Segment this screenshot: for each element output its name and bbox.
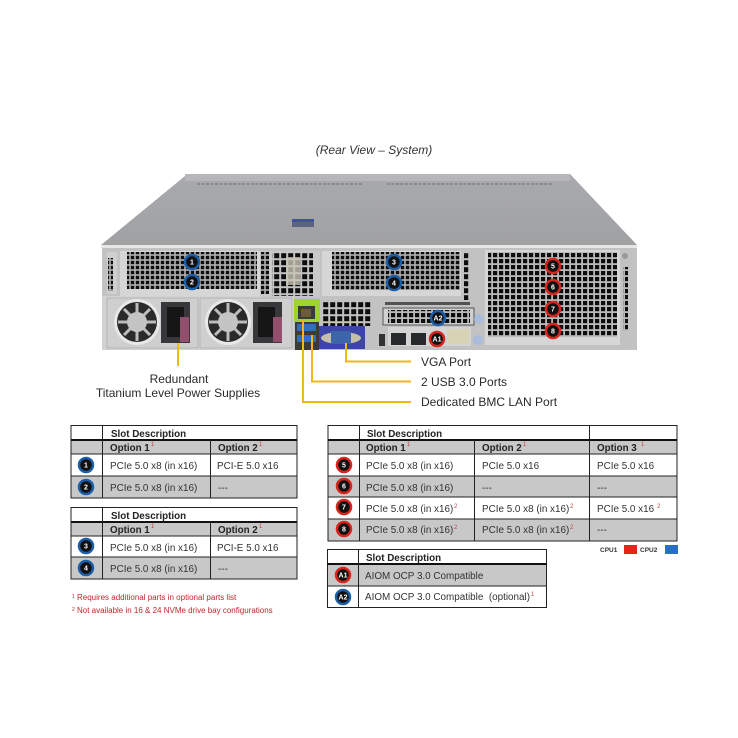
table: slots 5 to 8: PCIe 5.0 x8 (in x16) [366,525,453,536]
table: slots 1 and 2 [71,425,297,498]
chassis top cover [101,174,637,245]
table: slots 5 to 8: PCIe 5.0 x8 (in x16) [482,504,569,515]
server chassis rear view [101,174,637,350]
table: slots 1 and 2: PCIe 5.0 x8 (in x16) [110,461,197,472]
table: slots 5 to 8: PCIe 5.0 x8 (in x16) [482,525,569,536]
table: AIOM slots: AIOM OCP 3.0 Compatible [365,571,484,582]
table: slots 5 to 8: 2 [570,504,574,510]
table: slots 5 to 8: PCIe 5.0 x16 [482,461,540,472]
footnotes: 2 [72,607,75,613]
server slot markers: 3 [392,260,396,266]
table: slots 5 to 8: 2 [570,525,574,531]
server slot markers [185,255,560,346]
server slot markers: 4 [392,280,396,288]
table: slots 5 to 8: Option 3 [597,443,637,454]
table: AIOM slots: A2 [339,594,348,602]
middle expansion vent [322,251,461,296]
table: slots 1 and 2: Slot Description [111,429,186,440]
table: slots 1 and 2: Option 2 [218,443,258,454]
server slot markers: 8 [551,328,555,336]
AIOM slot A1 [379,327,471,346]
table: slots 5 to 8: 1 [407,442,411,448]
table: slots 3 and 4: 4 [84,566,88,572]
table: AIOM slots: A1 [339,572,348,580]
centre vent [261,251,320,297]
callout labels: 2 USB 3.0 Ports [421,375,507,389]
table: slots 1 and 2: 1 [259,442,263,448]
table: slots 1 and 2: --- [218,483,228,494]
VGA port [319,326,365,349]
table: slots 5 to 8: --- [597,525,607,536]
table: slots 5 to 8: Option 1 [366,443,406,454]
server slot markers: A1 [433,336,442,344]
chassis rear panel [101,245,637,350]
table: slots 5 to 8: PCIe 5.0 x8 (in x16) [366,483,453,494]
table: slots 5 to 8 [328,425,677,541]
table: slots 5 to 8: PCIe 5.0 x16 [597,461,655,472]
CPU legend: CPU2 [640,547,658,554]
table: slots 5 to 8: 2 [454,525,458,531]
right expansion vent [485,250,620,345]
server slot markers: 2 [190,280,194,286]
power supply 1 [107,298,198,348]
AIOM slot A2 [383,308,474,325]
footnotes: 1 [72,594,75,600]
footnotes: Not available in 16 & 24 NVMe drive bay configurations [75,606,273,615]
table: slots 3 and 4: Option 1 [110,525,150,536]
server slot markers: A2 [434,316,443,322]
table: slots 1 and 2: 1 [84,462,88,470]
table: AIOM slots: 1 [531,592,535,598]
table: slots 5 to 8: PCIe 5.0 x8 (in x16) [366,504,453,515]
table: slots 1 and 2: 2 [84,484,88,492]
table: slots 5 to 8: PCIe 5.0 x8 (in x16) [366,461,453,472]
table: slots 3 and 4: 1 [259,524,263,530]
BMC LAN port [294,299,320,322]
table: slots 1 and 2: PCIe 5.0 x8 (in x16) [110,483,197,494]
footnotes [72,593,273,615]
table: slots 3 and 4 [71,507,297,579]
table: slots 5 to 8: 2 [454,504,458,510]
CPU legend: CPU1 [600,547,618,554]
callout labels [96,355,558,409]
table: slots 5 to 8: 5 [342,462,346,470]
table: slots 5 to 8: 7 [342,504,346,512]
table: slots 5 to 8: --- [597,483,607,494]
callout labels: Redundant [150,372,209,386]
table: slots 5 to 8: 8 [342,526,346,534]
captive screws [473,314,484,345]
server slot markers: 7 [551,306,555,314]
table: slots 5 to 8: 2 [657,504,661,510]
CPU legend [600,545,678,554]
table: AIOM slots: AIOM OCP 3.0 Compatible (optional) [365,592,530,603]
power supply 2 [200,298,292,348]
table: slots 5 to 8: 1 [523,442,527,448]
table: slots 3 and 4: PCIe 5.0 x8 (in x16) [110,543,197,554]
callout labels: VGA Port [421,355,472,369]
table: slots 1 and 2: Option 1 [110,443,150,454]
table: slots 5 to 8: --- [482,483,492,494]
server slot markers: 6 [551,284,555,292]
table: slots 1 and 2: PCI-E 5.0 x16 [217,461,279,472]
table: AIOM slots: Slot Description [366,553,441,564]
table: slots 5 to 8: Option 2 [482,443,522,454]
table: slots 3 and 4: 3 [84,544,88,550]
table: slots 5 to 8: Slot Description [367,429,442,440]
table: AIOM slots [327,549,547,608]
table: slots 3 and 4: PCI-E 5.0 x16 [217,543,279,554]
table: slots 3 and 4: Option 2 [218,525,258,536]
table: slots 3 and 4: 1 [151,524,155,530]
left expansion vent [120,251,260,296]
mid grille [322,302,372,326]
table: slots 3 and 4: Slot Description [111,511,186,522]
table: slots 3 and 4: --- [218,564,228,575]
table: slots 5 to 8: 1 [641,442,645,448]
table: slots 1 and 2: 1 [151,442,155,448]
server slot markers: 5 [551,264,555,270]
USB 3.0 ports [295,322,319,350]
footnotes: Requires additional parts in optional parts list [75,593,237,602]
table: slots 3 and 4: PCIe 5.0 x8 (in x16) [110,564,197,575]
server slot markers: 1 [190,260,194,266]
title: (Rear View – System) [316,143,432,157]
callout labels: Titanium Level Power Supplies [96,386,260,400]
table: slots 5 to 8: PCIe 5.0 x16 [597,504,655,515]
table: slots 5 to 8: 6 [342,484,346,490]
callout labels: Dedicated BMC LAN Port [421,395,558,409]
callout lines [178,320,411,402]
